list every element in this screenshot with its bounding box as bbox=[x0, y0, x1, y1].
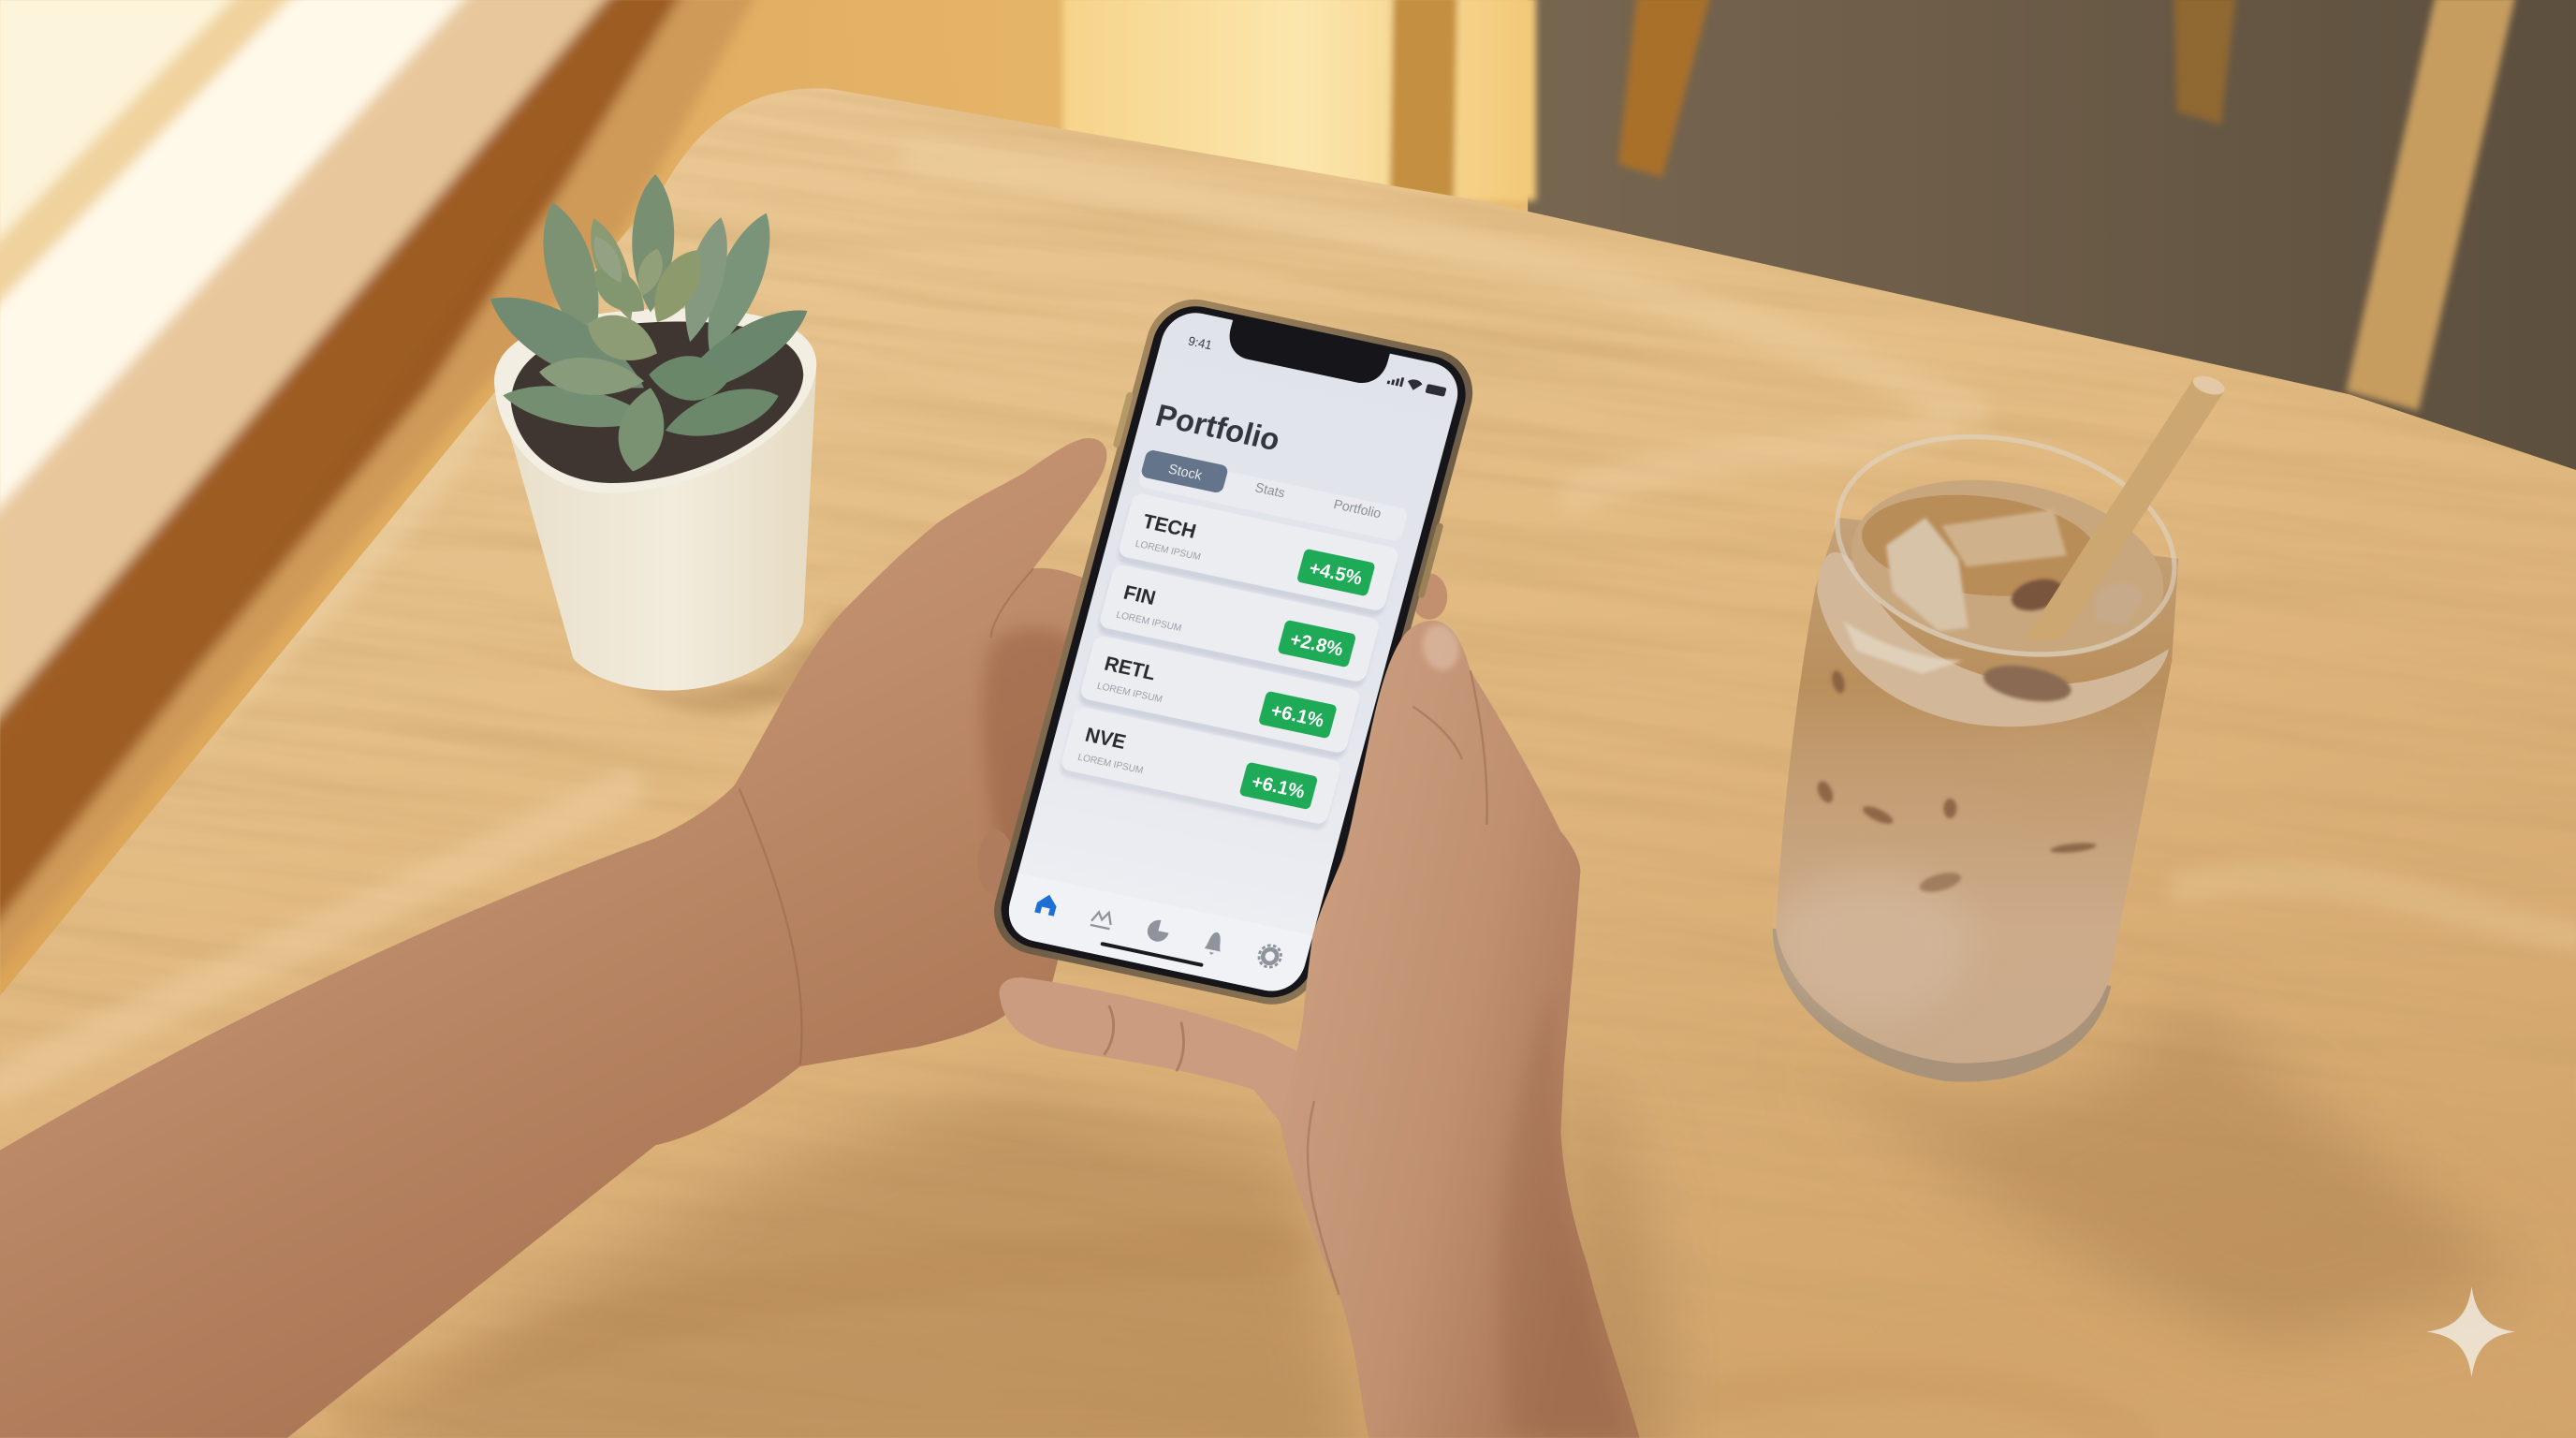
row: NVE: NVE bbox=[1083, 725, 1128, 754]
thumb and wrist creases bbox=[739, 568, 1033, 1064]
soft milk clouds bbox=[1775, 873, 1961, 1011]
chair legs bbox=[1602, 0, 2539, 424]
palm creases bbox=[1308, 670, 1487, 1295]
row: TECH bbox=[1116, 492, 1400, 619]
screen title: Portfolio bbox=[1152, 397, 1283, 457]
row: RETL bbox=[1077, 635, 1362, 761]
right hand bbox=[1280, 621, 1640, 1438]
white pot bbox=[494, 308, 816, 691]
glass rim bbox=[1817, 407, 2195, 684]
soil bbox=[511, 321, 803, 483]
ice cubes bbox=[1843, 509, 2144, 708]
left fingertip behind phone bbox=[977, 829, 1014, 896]
lip band bbox=[1817, 552, 2169, 726]
icon: bell bbox=[1203, 931, 1225, 957]
background: golden wall behind table bbox=[0, 0, 1528, 1051]
icon: home bbox=[1034, 893, 1059, 917]
straw bbox=[2024, 373, 2227, 640]
row: NVE: LOREM IPSUM bbox=[1076, 753, 1144, 776]
tab strip bbox=[1137, 449, 1410, 542]
icon: chart bbox=[1090, 910, 1114, 929]
row: RETL: LOREM IPSUM bbox=[1096, 682, 1164, 705]
row: RETL: +6.1% bbox=[1268, 700, 1326, 732]
row: FIN: LOREM IPSUM bbox=[1115, 610, 1182, 634]
iced coffee glass bbox=[1773, 373, 2227, 1082]
drink surface bbox=[1837, 457, 2178, 680]
potted succulent bbox=[477, 173, 818, 691]
row: NVE: +6.1% bbox=[1250, 771, 1307, 803]
ice in coffee bbox=[1814, 669, 2097, 896]
row: FIN: +2.8% bbox=[1288, 629, 1345, 661]
tab: portfolio: Portfolio bbox=[1332, 496, 1383, 521]
succulent leaves bbox=[477, 173, 818, 476]
wrist shadow bbox=[1500, 986, 1627, 1432]
tab: stats: Stats bbox=[1253, 479, 1287, 500]
row: TECH: TECH bbox=[1140, 511, 1198, 543]
glowing curtain with post bbox=[1051, 0, 1544, 211]
sparkle watermark bbox=[2426, 1286, 2515, 1377]
screen bbox=[1002, 307, 1465, 997]
row: FIN bbox=[1096, 564, 1381, 690]
status bar icons bbox=[1386, 374, 1447, 397]
right fingertip behind phone bbox=[1412, 574, 1447, 620]
active tab: Stock bbox=[1166, 462, 1204, 484]
row: RETL: RETL bbox=[1102, 653, 1158, 684]
row: TECH: LOREM IPSUM bbox=[1134, 539, 1202, 563]
row: NVE bbox=[1058, 706, 1342, 832]
smartphone bbox=[979, 290, 1488, 1014]
left forearm and hand bbox=[0, 438, 1134, 1438]
row: FIN: FIN bbox=[1121, 582, 1158, 609]
notch bbox=[1223, 318, 1390, 388]
thumb highlight bbox=[1418, 621, 1463, 674]
row: TECH: +4.5% bbox=[1307, 558, 1365, 590]
active tab bbox=[1140, 449, 1229, 493]
icon: pie bbox=[1145, 918, 1172, 944]
fingers under phone bbox=[1000, 977, 1298, 1123]
phone frame bbox=[984, 291, 1483, 1013]
bezel bbox=[992, 299, 1475, 1005]
palm shadow beside phone bbox=[982, 627, 1076, 888]
glass base bbox=[1773, 929, 2111, 1082]
home indicator bbox=[1100, 942, 1204, 967]
glass body bbox=[1776, 518, 2178, 1064]
side buttons bbox=[1112, 391, 1134, 448]
status bar time: 9:41 bbox=[1187, 333, 1214, 352]
bottom navigation bbox=[1002, 873, 1312, 997]
background: dark cafe floor bbox=[1528, 0, 2576, 493]
icon: gear bbox=[1256, 944, 1283, 969]
